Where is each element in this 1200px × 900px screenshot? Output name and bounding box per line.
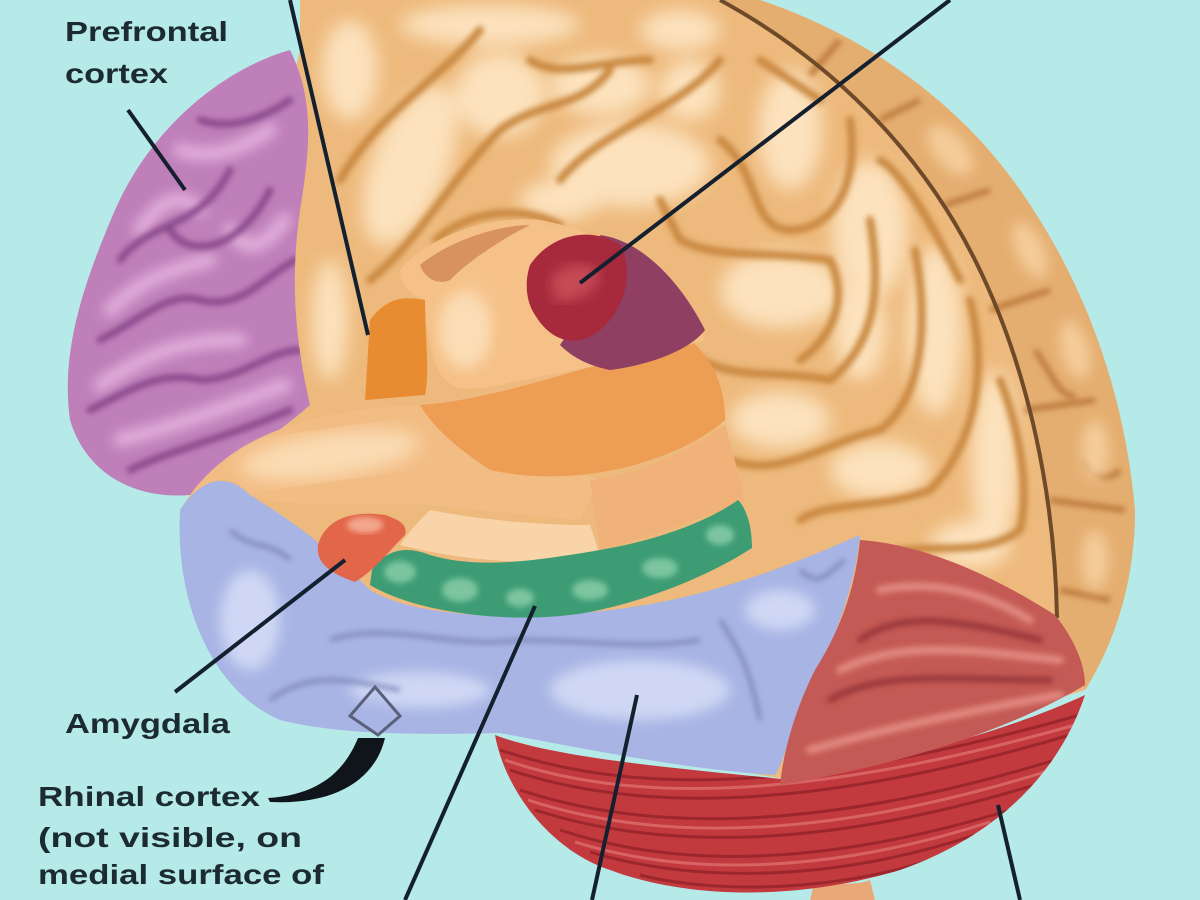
leader line: temporal bbox=[592, 695, 637, 900]
outer rim band bbox=[720, 0, 1135, 690]
prefrontal cortex (purple) bbox=[68, 50, 310, 496]
cortex main bbox=[180, 0, 1135, 780]
label: not visible: (not visible, on bbox=[38, 822, 302, 853]
maroon structure bbox=[527, 235, 705, 370]
central orange regions bbox=[365, 219, 745, 562]
leader line: top right bbox=[580, 0, 950, 283]
label: medial surface: medial surface of bbox=[38, 859, 325, 890]
leader line: top left bbox=[290, 0, 368, 335]
sulci bbox=[340, 30, 1024, 555]
label: amygdala: Amygdala bbox=[65, 708, 231, 739]
gyrus highlights bbox=[312, 5, 1019, 569]
leader line: hippocampus bbox=[405, 606, 535, 900]
brain stem bbox=[810, 880, 875, 900]
hippocampus (green band) bbox=[370, 500, 752, 618]
occipital region (red) bbox=[780, 540, 1085, 785]
label: rhinal cortex: Rhinal cortex bbox=[38, 781, 261, 812]
arrow: rhinal cortex bbox=[268, 738, 385, 802]
label: prefrontal cortex: Prefrontal bbox=[65, 16, 228, 47]
rim highlights bbox=[918, 117, 1109, 590]
leader line: cerebellum bbox=[998, 805, 1020, 900]
frontal fold bbox=[190, 405, 600, 520]
leader line: prefrontal bbox=[128, 110, 185, 190]
temporal lobe (blue) bbox=[180, 481, 860, 775]
rim sulci bbox=[810, 40, 1125, 600]
rhinal cortex marker bbox=[350, 687, 400, 735]
leader line: amygdala bbox=[175, 560, 345, 692]
label: cortex: cortex bbox=[65, 58, 169, 89]
amygdala (red-orange) bbox=[318, 514, 406, 582]
cerebellum bbox=[495, 695, 1085, 892]
rim dividing line bbox=[720, 0, 1057, 618]
